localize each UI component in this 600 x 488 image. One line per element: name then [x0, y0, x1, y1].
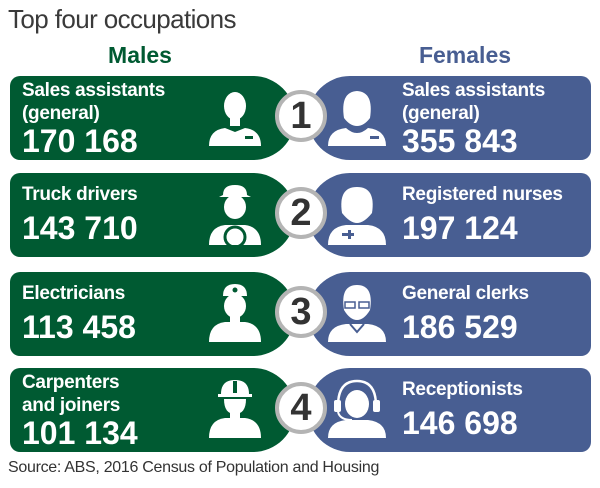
row 1 male panel: 170 168: [22, 123, 138, 159]
row 1 female panel: [308, 76, 591, 160]
number badge 1: [275, 90, 327, 142]
row 4 male panel: 101 134: [22, 415, 138, 451]
row 2 male panel: Truck drivers: [22, 184, 137, 205]
icon: clerk: [328, 285, 386, 342]
number badge 3: 3: [290, 291, 312, 333]
row 3 female panel: [308, 272, 591, 356]
row 2 female panel: Registered nurses: [402, 184, 563, 205]
row 3 female panel: General clerks: [402, 283, 529, 304]
row 3 male panel: Electricians: [22, 283, 125, 304]
heading: Males: Males: [108, 42, 172, 68]
row 4 male panel: Carpenters: [22, 372, 119, 393]
icon: male sales: [209, 92, 261, 146]
row 2 female panel: 197 124: [402, 210, 518, 246]
row 1 female panel: Sales assistants: [402, 80, 545, 101]
icon: carpenter: [209, 380, 261, 438]
row 1 female panel: (general): [402, 103, 480, 124]
row 3 male panel: [10, 272, 295, 356]
row 1 female panel: 355 843: [402, 123, 518, 159]
row 3 male panel: 113 458: [22, 309, 136, 345]
row 1 male panel: (general): [22, 103, 100, 124]
number badge 2: [275, 187, 327, 239]
row 2 male panel: 143 710: [22, 210, 138, 246]
row 4 female panel: 146 698: [402, 405, 518, 441]
number badge 1: 1: [290, 95, 312, 137]
icon: electrician: [209, 284, 261, 342]
icon: receptionist: [328, 380, 386, 438]
heading: Females: Females: [419, 42, 511, 68]
row 4 male panel: and joiners: [22, 395, 120, 416]
row 2 female panel: [308, 173, 591, 257]
row 1 male panel: [10, 76, 295, 160]
icon: female sales: [328, 91, 386, 146]
number badge 2: 2: [290, 192, 312, 234]
source note: Source: ABS, 2016 Census of Population and Housing: [8, 459, 379, 476]
title: Top four occupations: [8, 4, 236, 34]
number badge 3: [275, 286, 327, 338]
row 3 female panel: 186 529: [402, 309, 518, 345]
icon: nurse: [328, 187, 386, 245]
row 2 male panel: [10, 173, 295, 257]
row 4 male panel: [10, 368, 295, 452]
number badge 4: [275, 382, 327, 434]
row 4 female panel: Receptionists: [402, 379, 523, 400]
number badge 4: 4: [290, 387, 312, 429]
row 1 male panel: Sales assistants: [22, 80, 165, 101]
row 4 female panel: [308, 368, 591, 452]
icon: truck driver: [209, 185, 261, 245]
